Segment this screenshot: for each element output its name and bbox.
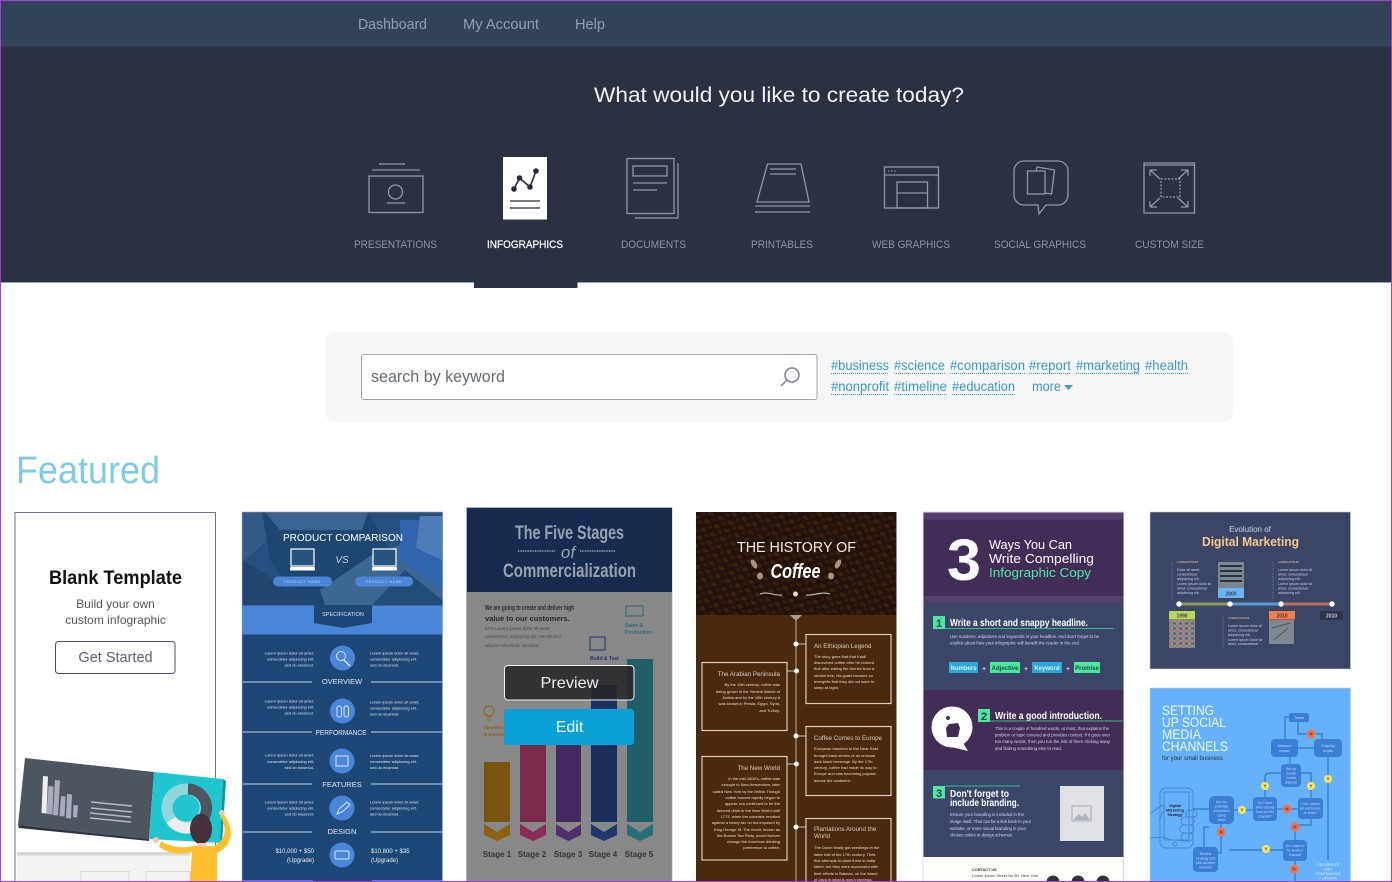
box: Ethiopian legend: that after eating the berries from a: [814, 666, 875, 671]
keyword tags: #health: [1145, 358, 1188, 373]
row: features: Lorem ipsum dolor sit amet,: [265, 752, 314, 758]
flow boxes: pick another: [1196, 861, 1216, 865]
keyword tags: #timeline: [894, 379, 947, 394]
box: Plantations around the world: Plantations Around the: [814, 826, 877, 833]
flow boxes: using: [1217, 814, 1226, 818]
flow boxes: Ongoing: [1321, 744, 1335, 748]
section 1: +: [1024, 666, 1028, 673]
yes / no markers: N: [1285, 807, 1289, 812]
box: Arabian Peninsula: The Arabian Peninsula: [718, 671, 781, 678]
row: pricing: $10,000 + $50: [275, 849, 315, 855]
row: performance: sed do eiusmod.: [370, 712, 399, 716]
icon: documents: [627, 158, 678, 218]
top navigation bar: My Account: [463, 17, 539, 33]
lorem callouts: LOREM IPSUM: [1177, 560, 1199, 564]
box: The New World: coffee houses rapidly began to: [726, 795, 781, 800]
row: overview: Lorem ipsum dolor sit amet,: [265, 650, 314, 656]
header: of: [561, 543, 577, 562]
box: Arabian Peninsula: Arabia and by the 16th century it: [722, 695, 781, 700]
intro text: consectetur adipiscing elit. Vestibulum: [485, 634, 561, 639]
label: web graphics: WEB GRAPHICS: [872, 239, 950, 251]
title block: 3: [947, 528, 981, 593]
flow boxes: results: [1323, 749, 1333, 753]
box: The New World: In the mid-1600's, coffee was: [728, 776, 780, 781]
lorem callouts: amet, consectetuer: [1278, 586, 1309, 590]
row: design: [243, 796, 442, 836]
top navigation bar: Dashboard: [358, 17, 427, 33]
box: Coffee comes to Europe: century, coffee had made its way to: [814, 765, 877, 770]
row: overview: consectetur adipiscing elit,: [267, 656, 314, 662]
box: Ethiopian legend: An Ethiopian Legend: [814, 643, 872, 650]
row: performance: sed do eiusmod.: [285, 710, 314, 716]
row: overview: sed do eiusmod.: [370, 662, 399, 668]
flow boxes: channel?: [1258, 814, 1272, 818]
keyword tags: more: [1032, 379, 1061, 394]
search input: [362, 354, 817, 400]
flow boxes: customers: [1213, 809, 1230, 813]
row: pricing: (Upgrade): [287, 858, 314, 864]
box: Ethiopian legend: certain tree, his goats became so: [814, 673, 874, 678]
section 1: Numbers: [950, 666, 977, 672]
yes / no markers: Y: [1309, 784, 1313, 789]
row: pricing: [275, 842, 410, 868]
box: The New World: [702, 756, 787, 860]
stage icons: & Exploration: [484, 732, 514, 737]
label: celebrate: Y UPDATE: [1319, 876, 1338, 880]
lorem callouts: amet, consectetuer: [1228, 642, 1259, 646]
footer contact: CONTACT US: [972, 868, 997, 872]
yes / no markers: Y: [1326, 777, 1330, 782]
top navigation bar: [0, 0, 1392, 46]
coffee header: THE HISTORY OF: [737, 540, 856, 556]
flow boxes: channel: [1285, 780, 1297, 784]
button: preview: Preview: [540, 675, 599, 692]
timeline: [1176, 601, 1335, 607]
row: performance: Lorem ipsum dolor sit amet,: [370, 700, 419, 704]
box: Coffee comes to Europe: Europe and was becoming popular: [814, 771, 876, 776]
icon: printables: [755, 164, 810, 212]
icon: custom size: [1144, 163, 1194, 213]
row: design: Lorem ipsum dolor sit amet,: [370, 800, 419, 804]
label: digital marketing strategy: Marketing: [1166, 808, 1185, 812]
title: for your small business: [1162, 756, 1223, 762]
box: Ethiopian legend: [806, 634, 891, 704]
lorem callouts: Lorem ipsum dolor sit: [1278, 568, 1312, 572]
section 2: 2: [981, 711, 987, 723]
label: custom size: CUSTOM SIZE: [1135, 239, 1204, 251]
section 1: 1: [936, 618, 942, 630]
header: Commercialization: [503, 561, 636, 582]
title block: [924, 512, 1124, 602]
box: The New World: brought to New Amsterdam, later: [722, 782, 781, 787]
flow connectors: [1193, 717, 1328, 882]
stage icons: Sales &: [625, 623, 643, 629]
box: The New World: The New World: [737, 765, 781, 772]
box: Arabian Peninsula: was known in Persia, Egypt, Syria,: [719, 701, 780, 706]
section 1: Promise: [1075, 666, 1099, 672]
title block: Ways You Can: [989, 538, 1072, 552]
box: Coffee comes to Europe: European travelers to the Near East: [814, 746, 879, 751]
keyword tags: #nonprofit: [831, 379, 889, 394]
box: Ethiopian legend: discovered coffee after he noticed: [814, 660, 874, 665]
lorem callouts: Lorem ipsum dolor sit: [1177, 582, 1211, 586]
flow boxes: Measure: [1278, 744, 1291, 748]
stage labels: Stage 1: [483, 850, 512, 859]
box: The New World: change the American drinking: [727, 839, 780, 844]
box: The New World: preference to coffee.: [743, 845, 780, 850]
card: evolution of digital marketing: [1150, 512, 1350, 669]
row: pricing: $10,800 + $35: [371, 849, 410, 855]
intro text: 87% Lorem ipsum dolor sit amet,: [485, 626, 551, 631]
lorem callouts: adipiscing elit.: [1278, 591, 1301, 595]
row: features: FEATURES: [322, 780, 362, 789]
row: overview: Lorem ipsum dolor sit amet,: [370, 650, 419, 656]
box: Coffee comes to Europe: Coffee Comes to Europe: [814, 735, 883, 742]
box: Ethiopian legend: sleep at night.: [814, 685, 839, 690]
title: SETTING: [1162, 703, 1214, 718]
milestone 2000: [1218, 562, 1244, 598]
coffee header: [696, 512, 896, 615]
row: design: Lorem ipsum dolor sit amet,: [265, 800, 314, 804]
lorem callouts: adipiscing elit.: [1278, 577, 1301, 581]
keyword tags: [831, 358, 1188, 394]
card: setting up social media channels: [1150, 688, 1350, 882]
row: features: [243, 748, 442, 789]
lorem callouts: Lorem ipsum dolor sit: [1228, 638, 1262, 642]
keyword tags: #education: [952, 379, 1015, 394]
card: write compelling infographic copy: [923, 512, 1124, 882]
row: features: consectetur adipiscing elit,: [267, 759, 314, 764]
section 3: include branding.: [950, 797, 1019, 809]
box: Plantations around the world: [806, 818, 891, 882]
milestone end: [1320, 611, 1343, 620]
stage icons: Production: [625, 630, 651, 636]
section 2: problem or topic covered and provides context. If it goes over: [995, 732, 1111, 738]
box: The New World: 1773, when the colonists revolted: [721, 814, 780, 819]
intro text: value to our customers.: [485, 614, 570, 623]
heading: Featured: Featured: [16, 450, 160, 492]
keyword tags: #report: [1029, 358, 1071, 373]
box: Ethiopian legend: The story goes that that Kaldi: [814, 654, 866, 659]
milestone 1990: [1169, 611, 1195, 648]
box: Coffee comes to Europe: brought back stories of an unusual: [814, 753, 875, 758]
button: preview: [504, 666, 634, 700]
box: Plantations around the world: The Dutch finally got seedlings in the: [814, 845, 880, 850]
header band: [0, 46, 1392, 288]
box: The New World: appear, tea continued to be the: [725, 801, 781, 806]
row: design: consectetur adipiscing elit,: [267, 806, 314, 810]
keyword tags: #business: [831, 358, 889, 373]
lorem callouts: amet, consectetuer: [1177, 586, 1208, 590]
lorem callouts: [1172, 560, 1312, 649]
button: edit: Edit: [556, 719, 584, 736]
yes / no markers: Y: [1263, 784, 1267, 789]
section 2: Write a good introduction.: [995, 710, 1102, 722]
icon: infographics: [503, 157, 547, 220]
section 2: [924, 690, 1124, 770]
yes / no markers: Y: [1240, 808, 1244, 813]
flow boxes: social: [1287, 772, 1296, 776]
box: Plantations around the world: failed, but they were successful with: [814, 864, 878, 869]
intro text: aliquet sollicitudin tincidunt.: [485, 643, 540, 648]
image placeholder: [1060, 786, 1104, 841]
lorem callouts: Lorem ipsum dolor sit: [1278, 582, 1312, 586]
button: get started: [56, 642, 175, 674]
button: edit: [504, 709, 634, 745]
label: celebrate: [1315, 863, 1341, 880]
row: overview: [243, 646, 442, 686]
footer contact: Lorem Ipsum Street No 50, New York: [972, 874, 1038, 878]
section 1: Keyword: [1034, 666, 1060, 672]
box: Coffee comes to Europe: across the continent.: [814, 778, 851, 783]
section 1: Adjective: [992, 666, 1019, 672]
section 2: This is a couple of hundred words, at most, that explains the: [995, 726, 1110, 731]
lorem callouts: amet, consectetuer: [1228, 628, 1259, 632]
row: features: Lorem ipsum dolor sit amet,: [370, 753, 419, 758]
milestone end: 2010: [1326, 614, 1337, 620]
icon: web graphics: [884, 167, 938, 208]
lorem callouts: amet, consectetuer: [1278, 572, 1309, 576]
stage labels: [483, 850, 654, 859]
section 1: Write a short and snappy headline.: [950, 617, 1088, 629]
section 3: chosen colors or design schemes.: [950, 832, 1013, 838]
yes / no markers: N: [1309, 732, 1313, 737]
yes / no markers: N: [1293, 825, 1297, 830]
milestone 2010: [1269, 611, 1295, 644]
lorem callouts: adipiscing elit.: [1228, 633, 1251, 637]
title block: Infographic Copy: [989, 566, 1092, 580]
row: design: sed do eiusmod.: [370, 812, 399, 816]
card: evolution of digital marketing: Digital Marketing: [1202, 535, 1299, 549]
header: PRODUCT NAME: [366, 580, 402, 584]
box: Arabian Peninsula: being grown in the Yemeni district of: [716, 689, 781, 694]
title: UP SOCIAL: [1162, 715, 1226, 730]
box: Plantations around the world: World: [814, 833, 831, 840]
section 3: image itself. That can be a link back to your: [950, 819, 1032, 824]
row: overview: consectetur adipiscing elit,: [370, 656, 417, 662]
keyword tags: #science: [894, 358, 945, 373]
header: [242, 512, 442, 606]
intro text: [485, 603, 574, 648]
section 3: [924, 770, 1124, 857]
label: social graphics: SOCIAL GRAPHICS: [994, 239, 1086, 251]
flow boxes: Can I afford: [1301, 802, 1320, 806]
card: evolution of digital marketing: Evolution of: [1229, 525, 1272, 534]
header: The Five Stages: [515, 523, 624, 544]
flow boxes: or team?: [1304, 811, 1317, 815]
card: blank template: custom infographic: [65, 613, 166, 627]
box: Coffee comes to Europe: dark black beverage. By the 17th: [814, 759, 872, 764]
title: CHANNELS: [1162, 739, 1228, 754]
icon: presentations: [369, 164, 423, 212]
section 2: and finding something else to read.: [995, 746, 1062, 751]
box: The New World: King George III. The revolt, known as: [714, 827, 780, 832]
flow boxes: media: [1286, 776, 1296, 780]
flow boxes: try another: [1287, 848, 1304, 852]
box: Arabian Peninsula: and Turkey.: [759, 708, 780, 713]
keyword tags: #marketing: [1076, 358, 1140, 373]
box: The New World: the Boston Tea Party, would forever: [717, 833, 781, 838]
header: [467, 508, 672, 592]
timeline: [787, 615, 806, 882]
row: features: sed do eiusmod.: [285, 765, 314, 770]
box: Plantations around the world: their efforts in Batavia, on the island: [814, 871, 878, 876]
panel: search: [325, 332, 1233, 422]
icon: social graphics: [1014, 161, 1068, 214]
box: The New World: called New York by the British.Though: [713, 789, 780, 794]
box: Plantations around the world: latter half of the 17th century. Their: [814, 852, 876, 857]
flow boxes: Are my: [1216, 800, 1227, 804]
stage labels: Stage 4: [589, 850, 618, 859]
flow boxes: potential: [1215, 804, 1228, 808]
row: performance: [243, 698, 442, 737]
row: overview: sed do eiusmod.: [285, 662, 314, 668]
stage labels: Stage 5: [625, 850, 654, 859]
flow boxes: Set up: [1286, 767, 1296, 771]
row: performance: Lorem ipsum dolor sit amet,: [265, 698, 314, 704]
stage icons: Identification: [484, 725, 512, 730]
title: MEDIA: [1162, 727, 1201, 742]
label: digital marketing strategy: Strategy: [1167, 813, 1183, 817]
section 1: [924, 602, 1124, 690]
flow boxes: [1193, 713, 1342, 872]
illustration: person holding dashboard: [17, 758, 231, 882]
flow boxes: time/ assets: [1256, 806, 1275, 810]
yes / no markers: N: [1292, 867, 1296, 872]
box: Plantations around the world: first attempts to plant them in India: [814, 858, 876, 863]
lorem callouts: LOREM IPSUM: [1228, 616, 1250, 620]
flow boxes: Do I want to: [1286, 844, 1304, 848]
label: digital marketing strategy: [1166, 804, 1185, 817]
label: infographics: INFOGRAPHICS: [487, 239, 563, 251]
lorem callouts: adipiscing elit.: [1177, 577, 1200, 581]
lorem callouts: Lorem ipsum dolor sit: [1228, 624, 1262, 628]
stage labels: Stage 2: [518, 850, 547, 859]
card: blank template: Build your own: [76, 597, 155, 611]
yes / no markers: Y: [1264, 847, 1268, 852]
row: performance: consectetur adipiscing elit,: [370, 706, 417, 710]
section 1: +: [1066, 666, 1070, 673]
button: get started: Get Started: [78, 650, 153, 666]
milestone 1990: 1990: [1176, 614, 1188, 620]
row: pricing: (Upgrade): [371, 858, 398, 864]
milestone 2010: 2010: [1276, 614, 1288, 620]
label: printables: PRINTABLES: [751, 239, 813, 251]
row: performance: PERFORMANCE: [316, 728, 366, 737]
keyword tags: #comparison: [950, 358, 1025, 373]
milestone 2000: 2000: [1225, 592, 1237, 598]
section 3: 3: [936, 788, 942, 800]
header: PRODUCT NAME: [284, 580, 321, 584]
specification band: [242, 605, 442, 634]
box: The New World: against a heavy tax on tea imposed by: [712, 820, 780, 825]
lorem callouts: consectetuer: [1177, 572, 1198, 576]
footer contact: [972, 868, 1110, 882]
heading: What would you like to create today?: [594, 84, 964, 107]
section 3: Ensure your branding is included in the: [950, 812, 1025, 817]
top navigation bar: Help: [575, 17, 605, 33]
stage bars: [484, 659, 653, 841]
card: blank template: [15, 512, 231, 882]
card: five stages (hover state): [466, 508, 672, 882]
stage labels: Stage 3: [554, 850, 583, 859]
row: features: consectetur adipiscing elit,: [370, 759, 417, 764]
label: celebrate: CONTINUOUS: [1315, 872, 1341, 876]
icon: magnifier: [781, 368, 799, 386]
flow boxes: an outsource: [1300, 806, 1321, 810]
flow boxes: Review: [1200, 852, 1212, 856]
header: PRODUCT COMPARISON: [283, 533, 403, 544]
box: Arabian Peninsula: By the 15th century, coffee was: [725, 682, 780, 687]
stage icons: [484, 606, 651, 737]
header: VS: [335, 555, 349, 566]
section 3: Don't forget to: [950, 788, 1009, 800]
card: blank template: Blank Template: [49, 567, 182, 589]
lorem callouts: Dolor sit amet,: [1177, 568, 1200, 572]
title block: Write Compelling: [989, 552, 1094, 566]
box: Arabian Peninsula: [702, 662, 787, 730]
section 1: explicit about how your infographic will benefit the reader in the end.: [950, 640, 1080, 646]
flow boxes: impact: [1279, 749, 1290, 753]
coffee header: Coffee: [770, 561, 820, 583]
flow boxes: how do this: [1256, 810, 1274, 814]
box: Plantations around the world: of Java in what is now Indonesia.: [814, 877, 873, 882]
row: design: sed do eiusmod.: [285, 812, 314, 816]
flow boxes: Tweak: [1294, 716, 1304, 720]
section 1: Use numbers, adjectives and keywords in your headline. And don't forget to be: [950, 634, 1100, 639]
section 3: website, or more visual branding in your: [950, 826, 1027, 831]
box: The New World: favored drink in the New World until: [717, 808, 780, 813]
box: Ethiopian legend: energetic that they did not want to: [814, 679, 875, 684]
specification band: SPECIFICATION: [322, 612, 364, 618]
box: Coffee comes to Europe: [806, 726, 891, 796]
yes / no markers: N: [1219, 830, 1223, 835]
flow boxes: channel: [1199, 866, 1212, 870]
label: documents: DOCUMENTS: [621, 239, 686, 251]
row: performance: consectetur adipiscing elit,: [267, 704, 314, 710]
label: digital marketing strategy: Digital: [1169, 804, 1181, 808]
flow boxes: strategy and: [1196, 856, 1215, 860]
phone outline: [1150, 788, 1197, 848]
intro text: We are going to create and deliver high: [485, 603, 574, 612]
card: product comparison: [242, 512, 442, 882]
label: celebrate: CELEBRATE: [1317, 863, 1340, 867]
flow boxes: Do I have: [1258, 801, 1273, 805]
flow boxes: channel: [1289, 853, 1301, 857]
search input: search by keyword: [371, 367, 505, 386]
yes / no markers: [1216, 730, 1332, 874]
row: design: consectetur adipiscing elit,: [370, 806, 417, 810]
lorem callouts: LOREM IPSUM: [1278, 560, 1300, 564]
row: features: sed do eiusmod.: [370, 765, 399, 770]
card: history of coffee: [696, 512, 896, 882]
row: design: DESIGN: [328, 827, 356, 836]
row: overview: OVERVIEW: [322, 677, 363, 686]
label: presentations: PRESENTATIONS: [354, 239, 437, 251]
flow boxes: them: [1218, 818, 1225, 822]
section 2: too many words, then you run the risk of them clicking away: [995, 739, 1111, 744]
lorem callouts: adipiscing elit.: [1177, 591, 1200, 595]
title: [1162, 703, 1228, 762]
label: celebrate: AND: [1324, 868, 1332, 872]
stage icons: Build & Test: [590, 656, 619, 662]
section 1: +: [982, 666, 986, 673]
